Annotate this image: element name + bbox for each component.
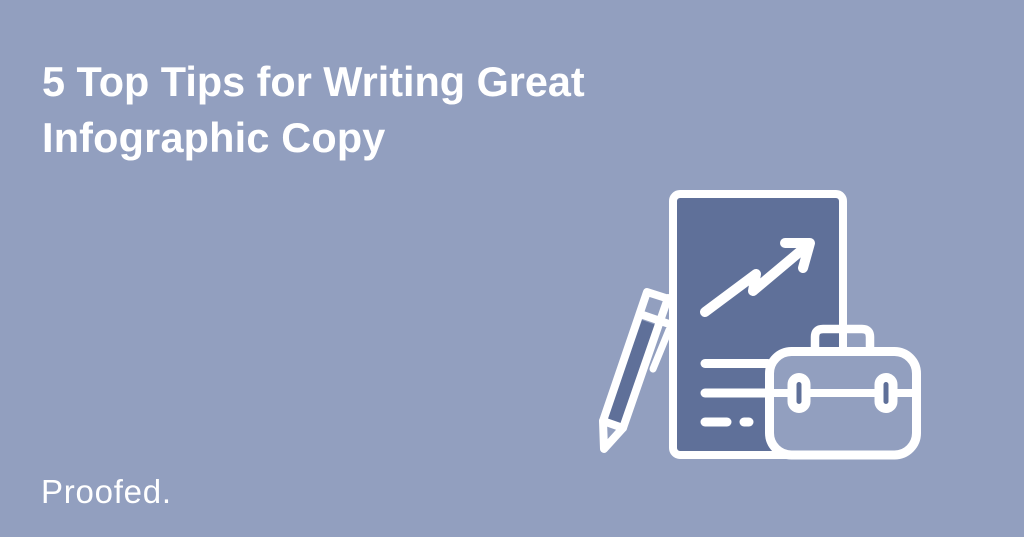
briefcase clasp right bbox=[879, 378, 893, 408]
title bbox=[42, 59, 585, 161]
title: Infographic Copy bbox=[42, 115, 386, 161]
briefcase clasp left bbox=[792, 378, 806, 408]
icon: document with chart arrow bbox=[673, 194, 843, 455]
icon: rising zigzag arrow bbox=[705, 243, 810, 312]
title: 5 Top Tips for Writing Great bbox=[42, 59, 585, 105]
icon: pencil bbox=[603, 292, 672, 449]
logo: Proofed wordmark: Proofed. bbox=[41, 473, 172, 510]
icon: briefcase bbox=[769, 329, 917, 455]
text lines on document bbox=[705, 364, 768, 422]
